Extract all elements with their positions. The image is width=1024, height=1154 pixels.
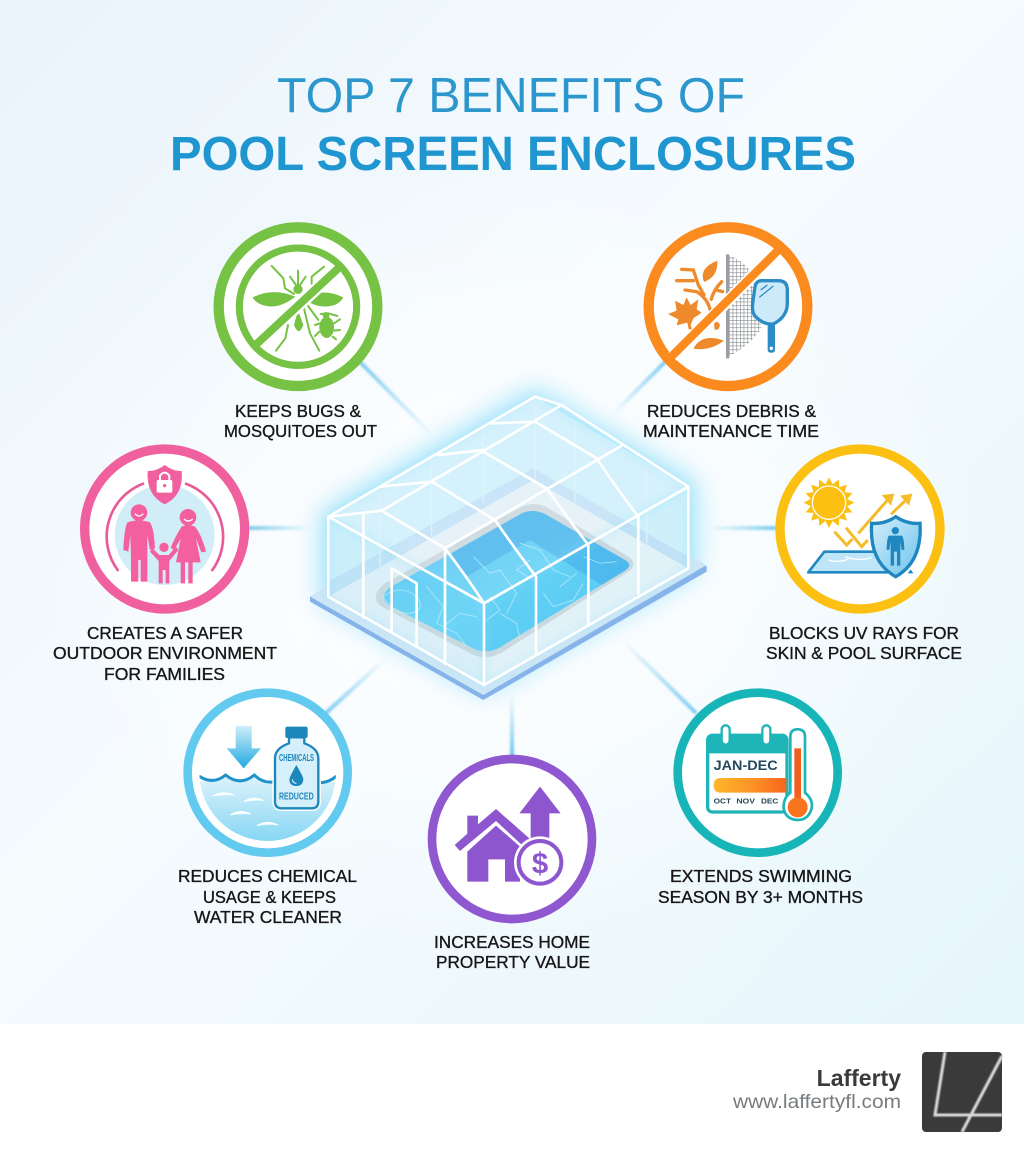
label [766, 623, 962, 663]
icon: house, arrow and coin [432, 759, 592, 919]
label: PROPERTY VALUE [436, 952, 590, 972]
central pool enclosure illustration [310, 397, 707, 700]
icon: calendar and thermometer: NOV [736, 797, 755, 806]
icon: sun, pool and shield [780, 449, 940, 609]
down arrow [227, 726, 261, 768]
label: KEEPS BUGS & [235, 401, 361, 421]
label [224, 401, 377, 441]
benefit: safer family environment [53, 449, 277, 684]
enclosure glass volume [328, 397, 688, 685]
label: INCREASES HOME [434, 932, 590, 952]
benefit: blocks UV [766, 449, 962, 663]
label: SKIN & POOL SURFACE [766, 643, 962, 663]
icon: calendar and thermometer: JAN-DEC [714, 758, 778, 773]
sun [804, 477, 854, 528]
label: USAGE & KEEPS [203, 887, 336, 907]
label: WATER CLEANER [194, 907, 342, 927]
footer brand text: Lafferty [817, 1065, 901, 1091]
label: SEASON BY 3+ MONTHS [658, 887, 863, 907]
icon: calendar and thermometer: OCT [714, 797, 732, 806]
icon: no mosquito [219, 227, 377, 386]
back wall base strip [328, 468, 688, 597]
title: POOL SCREEN ENCLOSURES [170, 128, 856, 181]
bottle [275, 737, 318, 808]
pool slab [808, 552, 888, 572]
label: OUTDOOR ENVIRONMENT [53, 643, 277, 663]
label [643, 401, 819, 441]
frame glow [328, 397, 688, 685]
label: REDUCES DEBRIS & [647, 401, 816, 421]
water [200, 773, 336, 841]
pool deck [328, 480, 688, 685]
calendar [708, 735, 787, 812]
icon: calendar and thermometer: DEC [761, 797, 779, 806]
enclosure white frame [328, 397, 688, 685]
label [658, 866, 863, 907]
benefit: increases home value [432, 759, 592, 972]
icon: water and chemicals bottle: REDUCED [279, 791, 314, 802]
label: EXTENDS SWIMMING [670, 866, 852, 886]
benefit: extends swimming season [658, 693, 863, 907]
benefit: reduces debris [643, 227, 819, 441]
label [53, 623, 277, 684]
icon: water and chemicals bottle: CHEMICALS [279, 753, 314, 764]
icon: calendar and thermometer [678, 693, 838, 853]
label: REDUCES CHEMICAL [178, 866, 357, 886]
pool water [384, 511, 629, 651]
label: MOSQUITOES OUT [224, 421, 377, 441]
footer brand text [732, 1065, 901, 1113]
label: FOR FAMILIES [104, 664, 225, 684]
footer band [0, 1024, 1024, 1154]
shield with person [871, 517, 920, 577]
label: MAINTENANCE TIME [643, 421, 819, 441]
icon: house, arrow and coin: $ [532, 847, 548, 880]
label: CREATES A SAFER [87, 623, 243, 643]
skimmer net [752, 281, 787, 324]
water caustics [383, 543, 617, 647]
pool deep section [452, 511, 629, 585]
thermometer [784, 729, 812, 820]
family figures [123, 504, 206, 583]
icon: family with shield [85, 449, 245, 609]
title [170, 69, 856, 181]
base plate [310, 468, 707, 700]
benefit: reduces chemicals [178, 693, 357, 927]
pool coping [376, 504, 633, 657]
title: TOP 7 BENEFITS OF [277, 69, 745, 123]
label [434, 932, 590, 972]
front glass panes [328, 397, 688, 685]
shield lock [148, 465, 182, 504]
footer brand text: www.laffertyfl.com [732, 1091, 901, 1113]
reflected rays [834, 498, 908, 547]
label [178, 866, 357, 927]
icon: debris and skimmer [649, 227, 807, 386]
icon: water and chemicals bottle [188, 693, 348, 853]
label: BLOCKS UV RAYS FOR [769, 623, 959, 643]
footer logo [922, 1052, 1002, 1132]
mesh screen [728, 255, 762, 357]
enclosure glow [328, 397, 688, 685]
connector lines [250, 362, 775, 755]
benefit: keeps bugs out [219, 227, 377, 441]
faint back frame [380, 397, 647, 567]
